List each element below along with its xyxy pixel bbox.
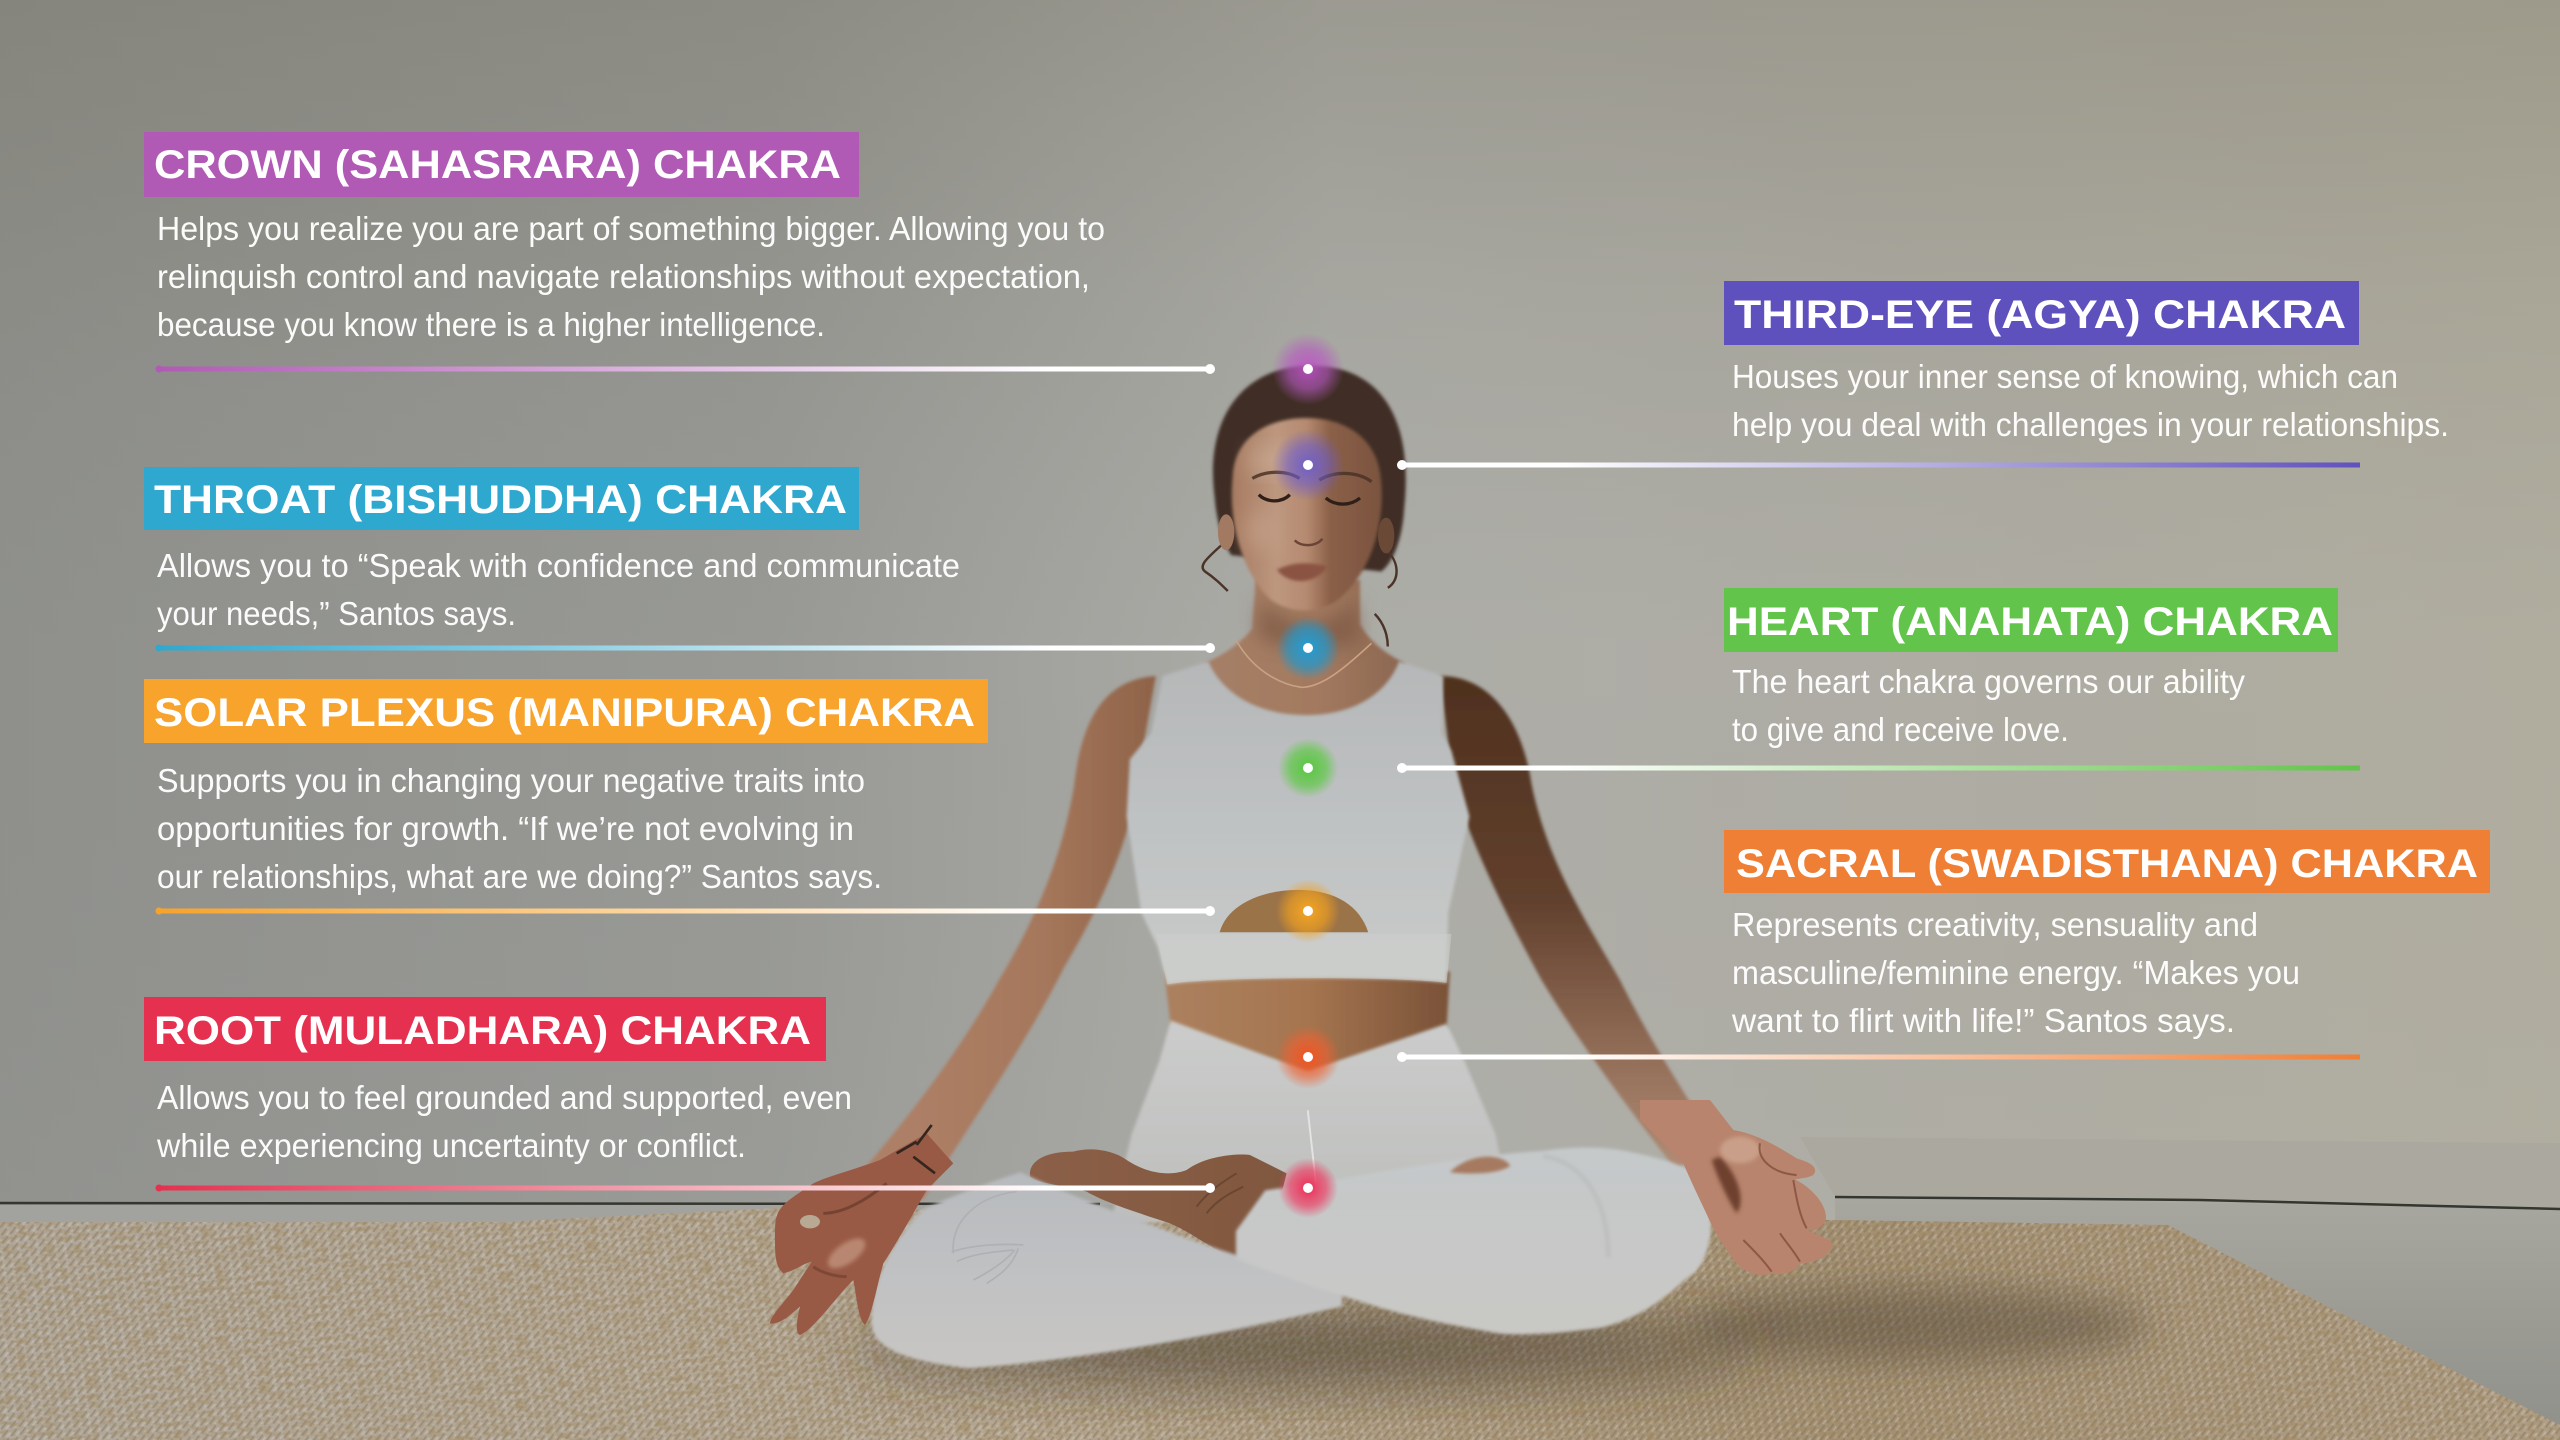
panel: heart chakra [1397,588,2360,773]
heading: sacral [1724,830,2490,893]
text: third-eye description [1732,358,2449,443]
heading: crown: CROWN (SAHASRARA) CHAKRA [154,143,841,187]
leader line: sacral [1397,1052,2360,1062]
top hem band [1156,934,1451,985]
text: third-eye description: Houses your inner sense of knowing, which can [1732,358,2398,395]
text: heart description: to give and receive love. [1732,711,2069,748]
knee crease [1543,1156,1608,1257]
right leg [1236,1148,1711,1334]
right hand [1640,1100,1833,1275]
panel: root chakra [144,997,1215,1193]
chakra point: throat [1276,616,1340,680]
heading: heart [1724,588,2338,652]
hair [1203,366,1406,647]
bare foot [1030,1149,1287,1280]
heading: solar plexus: SOLAR PLEXUS (MANIPURA) CHAKRA [154,691,975,735]
text: root description: Allows you to feel grounded and supported, even [157,1079,852,1116]
chin shadow [1257,598,1360,648]
leader line: third-eye [1397,460,2360,470]
text: solar plexus description: opportunities for growth. “If we’re not evolving in [157,810,854,847]
heading: throat [144,467,859,530]
text: crown description: because you know there is a higher intelligence. [157,306,825,343]
panel: crown chakra [144,132,1215,374]
text: heart description: The heart chakra governs our ability [1732,663,2245,700]
top cutout [1220,890,1368,932]
heading: third-eye [1724,281,2359,345]
text: sacral description: want to flirt with life!” Santos says. [1731,1002,2235,1039]
neck and chest [1205,580,1407,718]
leader line: heart [1397,763,2360,773]
text: throat description [157,547,960,632]
panel: sacral chakra [1397,830,2490,1062]
white tank top [1127,661,1469,985]
leggings waist [1110,1020,1510,1225]
chakra point: heart [1278,738,1338,798]
face [1218,418,1394,610]
small foot [1450,1157,1510,1174]
chakra point: sacral [1276,1025,1340,1089]
necklace [1236,640,1371,687]
text: heart description [1732,663,2245,748]
text: crown description: Helps you realize you are part of something bigger. Allowing you to [157,210,1105,247]
right arm [1440,676,1718,1169]
left arm [865,676,1156,1200]
text: root description [156,1079,852,1164]
left leg [871,1172,1342,1368]
panel: solar plexus chakra [144,679,1215,916]
leg folds [952,1192,1023,1283]
text: crown description: relinquish control and navigate relationships without expectation, [157,258,1090,295]
panel: third-eye chakra [1397,281,2449,470]
text: root description: while experiencing uncertainty or conflict. [156,1127,746,1164]
leader line: crown [156,364,1215,374]
chakra point: third eye [1272,429,1344,501]
heading: solar plexus [144,679,988,743]
text: solar plexus description: our relationships, what are we doing?” Santos says. [157,858,882,895]
heading: third-eye: THIRD-EYE (AGYA) CHAKRA [1734,293,2346,337]
text: sacral description [1731,906,2300,1039]
panel: throat chakra [144,467,1215,653]
heading: crown [144,132,859,197]
text: sacral description: masculine/feminine energy. “Makes you [1732,954,2300,991]
heading: root: ROOT (MULADHARA) CHAKRA [154,1009,811,1053]
text: crown description [157,210,1105,343]
figure: meditating woman [770,366,1833,1381]
text: throat description: Allows you to “Speak with confidence and communicate [157,547,960,584]
heading: throat: THROAT (BISHUDDHA) CHAKRA [154,478,847,522]
heading: heart: HEART (ANAHATA) CHAKRA [1727,600,2333,644]
text: third-eye description: help you deal with challenges in your relationships. [1732,406,2449,443]
leader line: solar plexus [156,906,1215,916]
floor shadow [849,1316,1763,1381]
heading: sacral: SACRAL (SWADISTHANA) CHAKRA [1736,842,2478,886]
left hand [770,1125,953,1335]
leader line: root [156,1183,1215,1193]
chakra point: crown [1272,333,1344,405]
text: solar plexus description [157,762,882,895]
leader line: throat [156,643,1215,653]
midriff [1164,971,1450,1074]
chakra point: solar plexus [1276,879,1340,943]
text: solar plexus description: Supports you in changing your negative traits into [157,762,865,799]
text: sacral description: Represents creativity, sensuality and [1732,906,2258,943]
text: throat description: your needs,” Santos says. [157,595,516,632]
chakra point: root [1278,1158,1338,1218]
heading: root [144,997,826,1061]
